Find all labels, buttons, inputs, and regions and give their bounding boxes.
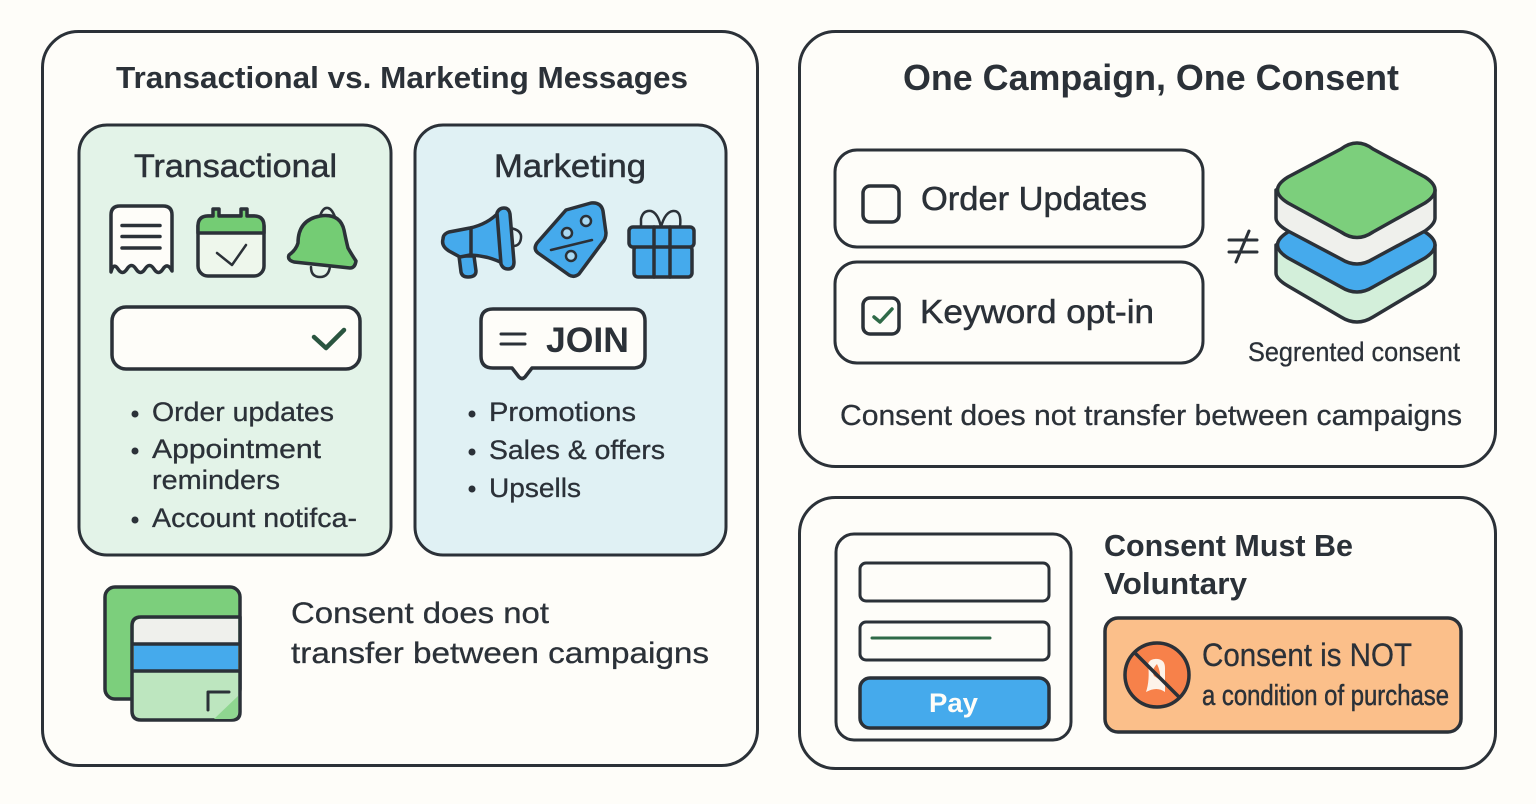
option: order updates: Order Updates: [921, 180, 1147, 217]
panel: one campaign one consent: [800, 32, 1496, 466]
list: transactional examples: reminders: [152, 465, 280, 495]
input field with checkmark: [112, 307, 360, 369]
list: marketing examples: Upsells: [489, 473, 581, 503]
callout: consent is not a condition of purchase: a condition of purchase: [1202, 680, 1449, 712]
list: transactional examples: Account notifca-: [152, 503, 357, 533]
icon: gift box: [629, 211, 694, 277]
list: marketing examples: Sales & offers: [489, 435, 665, 465]
option: order updates: [835, 150, 1203, 247]
option: keyword opt-in: [835, 262, 1203, 363]
panel: transactional: [79, 125, 391, 555]
list: transactional examples: Appointment: [152, 434, 322, 464]
callout: consent is not a condition of purchase: Consent is NOT: [1202, 637, 1412, 673]
icon: megaphone: [443, 208, 521, 277]
heading: consent must be voluntary: [1104, 528, 1353, 601]
icon: prohibited sign: [1125, 643, 1189, 707]
heading: one campaign one consent: One Campaign, One Consent: [903, 57, 1399, 98]
icon: calendar: [198, 209, 264, 276]
icon: discount tag: [535, 203, 606, 276]
icon: receipt: [111, 206, 172, 272]
label: segrented consent: Segrented consent: [1248, 337, 1460, 367]
keyword join bubble: JOIN: [546, 321, 629, 360]
heading: consent must be voluntary: Voluntary: [1104, 566, 1248, 601]
checkout form mockup: [836, 534, 1071, 740]
panel: marketing: [415, 125, 726, 555]
heading: consent must be voluntary: Consent Must Be: [1104, 528, 1353, 563]
panel: transactional vs marketing: [42, 32, 758, 766]
text: consent does not transfer: [291, 597, 709, 670]
checkout form mockup: Pay: [929, 688, 978, 718]
list: marketing examples: Promotions: [489, 397, 636, 427]
keyword join bubble: [481, 309, 645, 378]
text: consent does not transfer: transfer between campaigns: [291, 637, 709, 670]
text: consent does not transfer: Consent does not: [291, 597, 550, 630]
heading: marketing: Marketing: [494, 148, 646, 184]
option: keyword opt-in: Keyword opt-in: [920, 293, 1154, 330]
icon: not equal sign: [1229, 231, 1257, 262]
list: transactional examples: [132, 397, 357, 533]
list: marketing examples: [468, 397, 665, 503]
icon: bell: [289, 208, 356, 277]
panel: consent must be voluntary: [800, 498, 1496, 768]
icon: layered cards: [105, 587, 240, 720]
caption: consent does not transfer: Consent does not transfer between campaigns: [840, 400, 1462, 432]
list: transactional examples: Order updates: [152, 397, 334, 427]
heading: transactional vs marketing messages: Transactional vs. Marketing Messages: [116, 60, 688, 95]
icon: segmented layer stack: [1276, 143, 1435, 322]
heading: transactional: Transactional: [134, 148, 337, 184]
callout: consent is not a condition of purchase: [1105, 618, 1461, 732]
